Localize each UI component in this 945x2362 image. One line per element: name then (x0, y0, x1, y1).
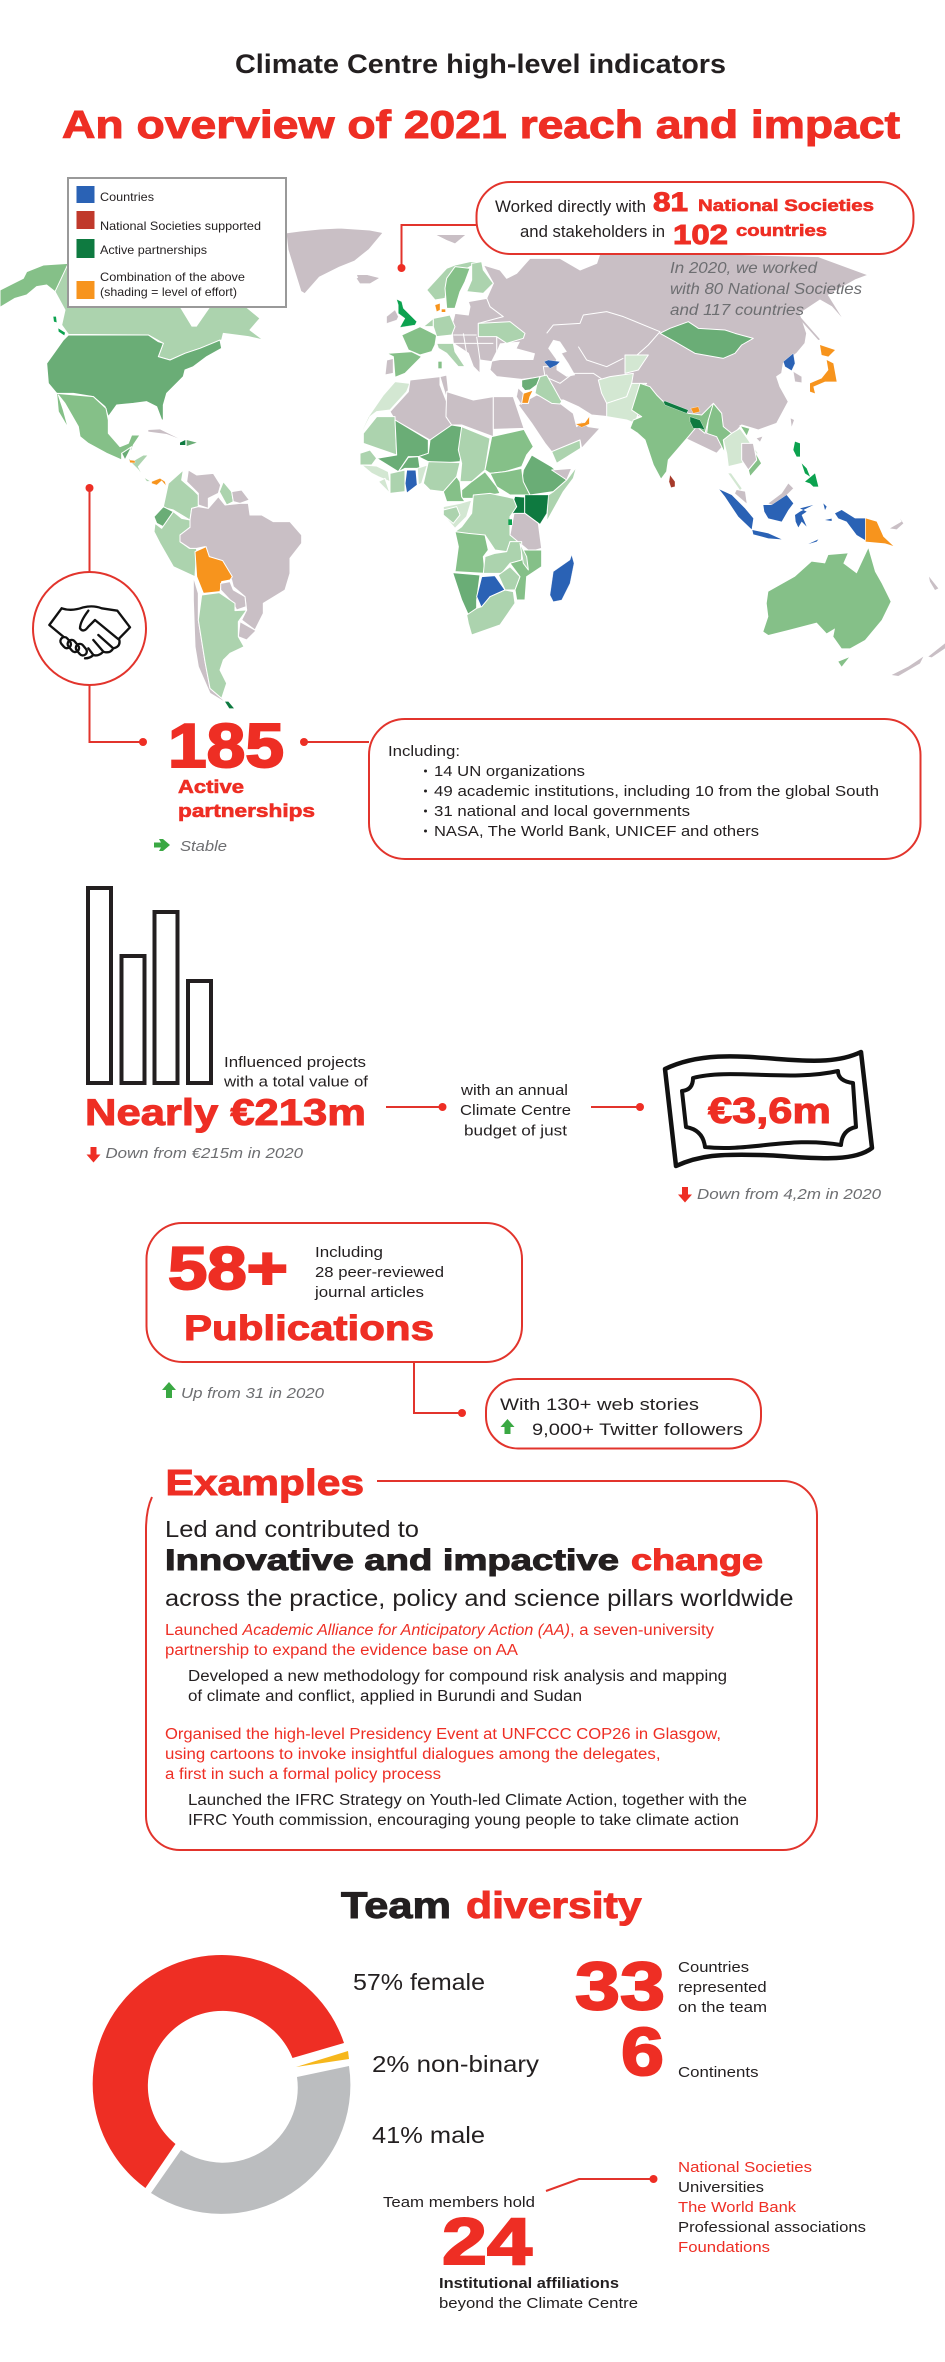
panel: publications (146, 1223, 522, 1362)
panel: partnership breakdown: 31 national and local governments (434, 803, 690, 820)
panel: publications: journal articles (314, 1284, 424, 1301)
donut labels (353, 1969, 540, 2148)
example: cop26 and youth strategy: Organised the high-level Presidency Event at UNFCCC COP26 in Glasgow, (165, 1726, 721, 1743)
stat: 24 institutional affiliations: beyond the Climate Centre (439, 2295, 638, 2312)
stat: 24 institutional affiliations (383, 2194, 638, 2312)
stat: 33 countries (575, 1948, 767, 2024)
map: south and east asia (598, 317, 837, 490)
connector: publications to web stories (414, 1362, 466, 1417)
text: annual budget: budget of just (464, 1122, 568, 1140)
connector: affiliations to list (546, 2175, 658, 2191)
icon: banknote with budget value: €3,6m (708, 1090, 831, 1131)
legend: national societies (76, 211, 261, 233)
callout: national societies and countries: National Societies (698, 196, 874, 215)
affiliation list: The World Bank (678, 2199, 797, 2216)
legend: active partnerships (76, 239, 207, 258)
legend: countries: Countries (100, 190, 154, 204)
donut labels: 2% non-binary (372, 2051, 540, 2077)
icon: bar chart (88, 888, 211, 1083)
2020 comparison note: In 2020, we worked (670, 260, 818, 277)
panel: examples (146, 1462, 817, 1850)
stat: 185 active partnerships (168, 712, 315, 821)
arrow: to budget text (386, 1103, 446, 1111)
callout: national societies and countries: 102 (673, 219, 728, 250)
stat: nearly 213m: Nearly €213m (85, 1091, 366, 1133)
world map (0, 227, 945, 708)
panel: web stories and twitter (486, 1379, 761, 1448)
panel: partnership breakdown: Including: (388, 743, 460, 760)
callout: national societies and countries: countries (736, 221, 827, 240)
callout: national societies and countries: 81 (653, 187, 688, 217)
stat: 24 institutional affiliations: Institutional affiliations (439, 2275, 619, 2292)
panel: partnership breakdown: 14 UN organizations (434, 763, 585, 780)
example: cop26 and youth strategy: a first in such a formal policy process (165, 1766, 441, 1783)
callout: national societies and countries: Worked directly with (495, 197, 646, 216)
legend: countries (76, 186, 154, 204)
affiliation list: Professional associations (678, 2219, 866, 2236)
panel: publications: Including (315, 1244, 383, 1261)
stat: 185 active partnerships: 185 (168, 712, 284, 781)
stat: 185 active partnerships: partnerships (178, 801, 315, 821)
legend: active partnerships: Active partnerships (100, 243, 207, 257)
text: annual budget (460, 1082, 571, 1140)
map: north america (0, 263, 283, 486)
examples intro: across the practice, policy and science pillars worldwide (165, 1585, 794, 1611)
stat: 33 countries: on the team (678, 1999, 767, 2016)
examples intro: change (631, 1544, 763, 1577)
example: academic alliance: Developed a new methodology for compound risk analysis and mapping (188, 1668, 727, 1685)
panel: publications: Publications (184, 1308, 434, 1348)
stat: 33 countries: Countries (678, 1959, 749, 1976)
team diversity heading: diversity (466, 1885, 642, 1926)
team diversity heading (341, 1885, 642, 1926)
team diversity heading: Team (341, 1885, 451, 1926)
stat: 33 countries: 33 (575, 1948, 665, 2024)
donut labels: 57% female (353, 1969, 485, 1995)
example: academic alliance: partnership to expand the evidence base on AA (165, 1642, 519, 1659)
trend: stable (154, 838, 227, 855)
trend: up from 31 (162, 1382, 325, 1402)
example: academic alliance: Academic Alliance for Anticipatory Action (AA) (241, 1622, 570, 1639)
stat: 24 institutional affiliations: Team members hold (383, 2194, 535, 2211)
map: central and southern africa (443, 493, 574, 635)
text: influenced projects: with a total value of (223, 1074, 369, 1090)
example: academic alliance: Launched (165, 1622, 238, 1639)
map: europe (357, 235, 589, 463)
partnership connector line (86, 484, 147, 746)
stat: 24 institutional affiliations: 24 (442, 2204, 532, 2278)
map legend (68, 178, 286, 307)
title: Climate Centre high-level indicators (235, 49, 726, 79)
donut labels: 41% male (372, 2122, 485, 2148)
example: academic alliance: , a seven-university (570, 1622, 714, 1639)
legend: combination: Combination of the above (100, 270, 245, 284)
panel: web stories and twitter: With 130+ web stories (500, 1395, 699, 1414)
example: academic alliance (165, 1622, 727, 1705)
examples intro: Led and contributed to (165, 1516, 419, 1542)
panel: partnership breakdown: NASA, The World Bank, UNICEF and others (434, 823, 759, 840)
affiliation list (678, 2159, 866, 2256)
map: indonesia and oceania (719, 483, 945, 676)
leader line to map (398, 225, 476, 272)
trend: stable: Stable (180, 838, 227, 855)
legend: combination: (shading = level of effort) (100, 285, 237, 299)
stat: 185 active partnerships: Active (178, 777, 244, 797)
legend: combination (76, 270, 245, 299)
icon: banknote with budget value (665, 1052, 872, 1166)
text: annual budget: Climate Centre (460, 1102, 571, 1119)
icon: handshake in circle (33, 572, 146, 685)
panel: partnership breakdown (369, 719, 920, 859)
affiliation list: National Societies (678, 2159, 812, 2176)
main heading: An overview of 2021 reach and impact (62, 104, 900, 147)
text: influenced projects: Influenced projects (224, 1054, 366, 1071)
affiliation list: Universities (678, 2179, 764, 2196)
panel: web stories and twitter: 9,000+ Twitter followers (532, 1420, 743, 1439)
trend: down from 215m: Down from €215m in 2020 (106, 1145, 304, 1162)
map: eurasia base (452, 252, 868, 453)
map: greenland and arctic (285, 227, 465, 295)
example: cop26 and youth strategy (165, 1726, 747, 1829)
stat: 6 continents (621, 2014, 758, 2090)
text: annual budget: with an annual (460, 1082, 568, 1099)
callout: national societies and countries: and stakeholders in (520, 222, 665, 241)
2020 comparison note: with 80 National Societies (670, 281, 862, 298)
2020 comparison note (670, 260, 862, 319)
callout: national societies and countries (476, 182, 914, 254)
legend: national societies: National Societies supported (100, 219, 261, 233)
panel: publications: 58+ (168, 1235, 288, 1302)
example: cop26 and youth strategy: Launched the IFRC Strategy on Youth-led Climate Action, together with the (188, 1792, 747, 1809)
panel: partnership breakdown: 49 academic institutions, including 10 from the global South (434, 783, 879, 800)
stat: 6 continents: 6 (621, 2014, 664, 2090)
examples intro (165, 1516, 794, 1611)
affiliation list: Foundations (678, 2239, 770, 2256)
donut chart: gender (93, 1955, 350, 2214)
panel: publications: 28 peer-reviewed (315, 1264, 444, 1281)
text: influenced projects (223, 1054, 369, 1090)
examples intro: Innovative and impactive (165, 1544, 619, 1577)
stat: 33 countries: represented (678, 1979, 767, 1996)
arrow: to banknote (591, 1103, 644, 1111)
2020 comparison note: and 117 countries (670, 302, 804, 319)
example: cop26 and youth strategy: using cartoons to invoke insightful dialogues among the delegates, (165, 1746, 660, 1763)
example: academic alliance: of climate and conflict, applied in Burundi and Sudan (188, 1688, 582, 1705)
map: south america (154, 470, 302, 708)
map: north and west africa (360, 375, 577, 524)
stat: 6 continents: Continents (678, 2064, 758, 2081)
examples heading: Examples (166, 1462, 364, 1503)
trend: down from 4.2m: Down from 4,2m in 2020 (697, 1186, 882, 1203)
connector to partnerships box (300, 738, 369, 746)
trend: up from 31: Up from 31 in 2020 (181, 1385, 325, 1402)
example: cop26 and youth strategy: IFRC Youth commission, encouraging young people to take climate action (188, 1812, 739, 1829)
